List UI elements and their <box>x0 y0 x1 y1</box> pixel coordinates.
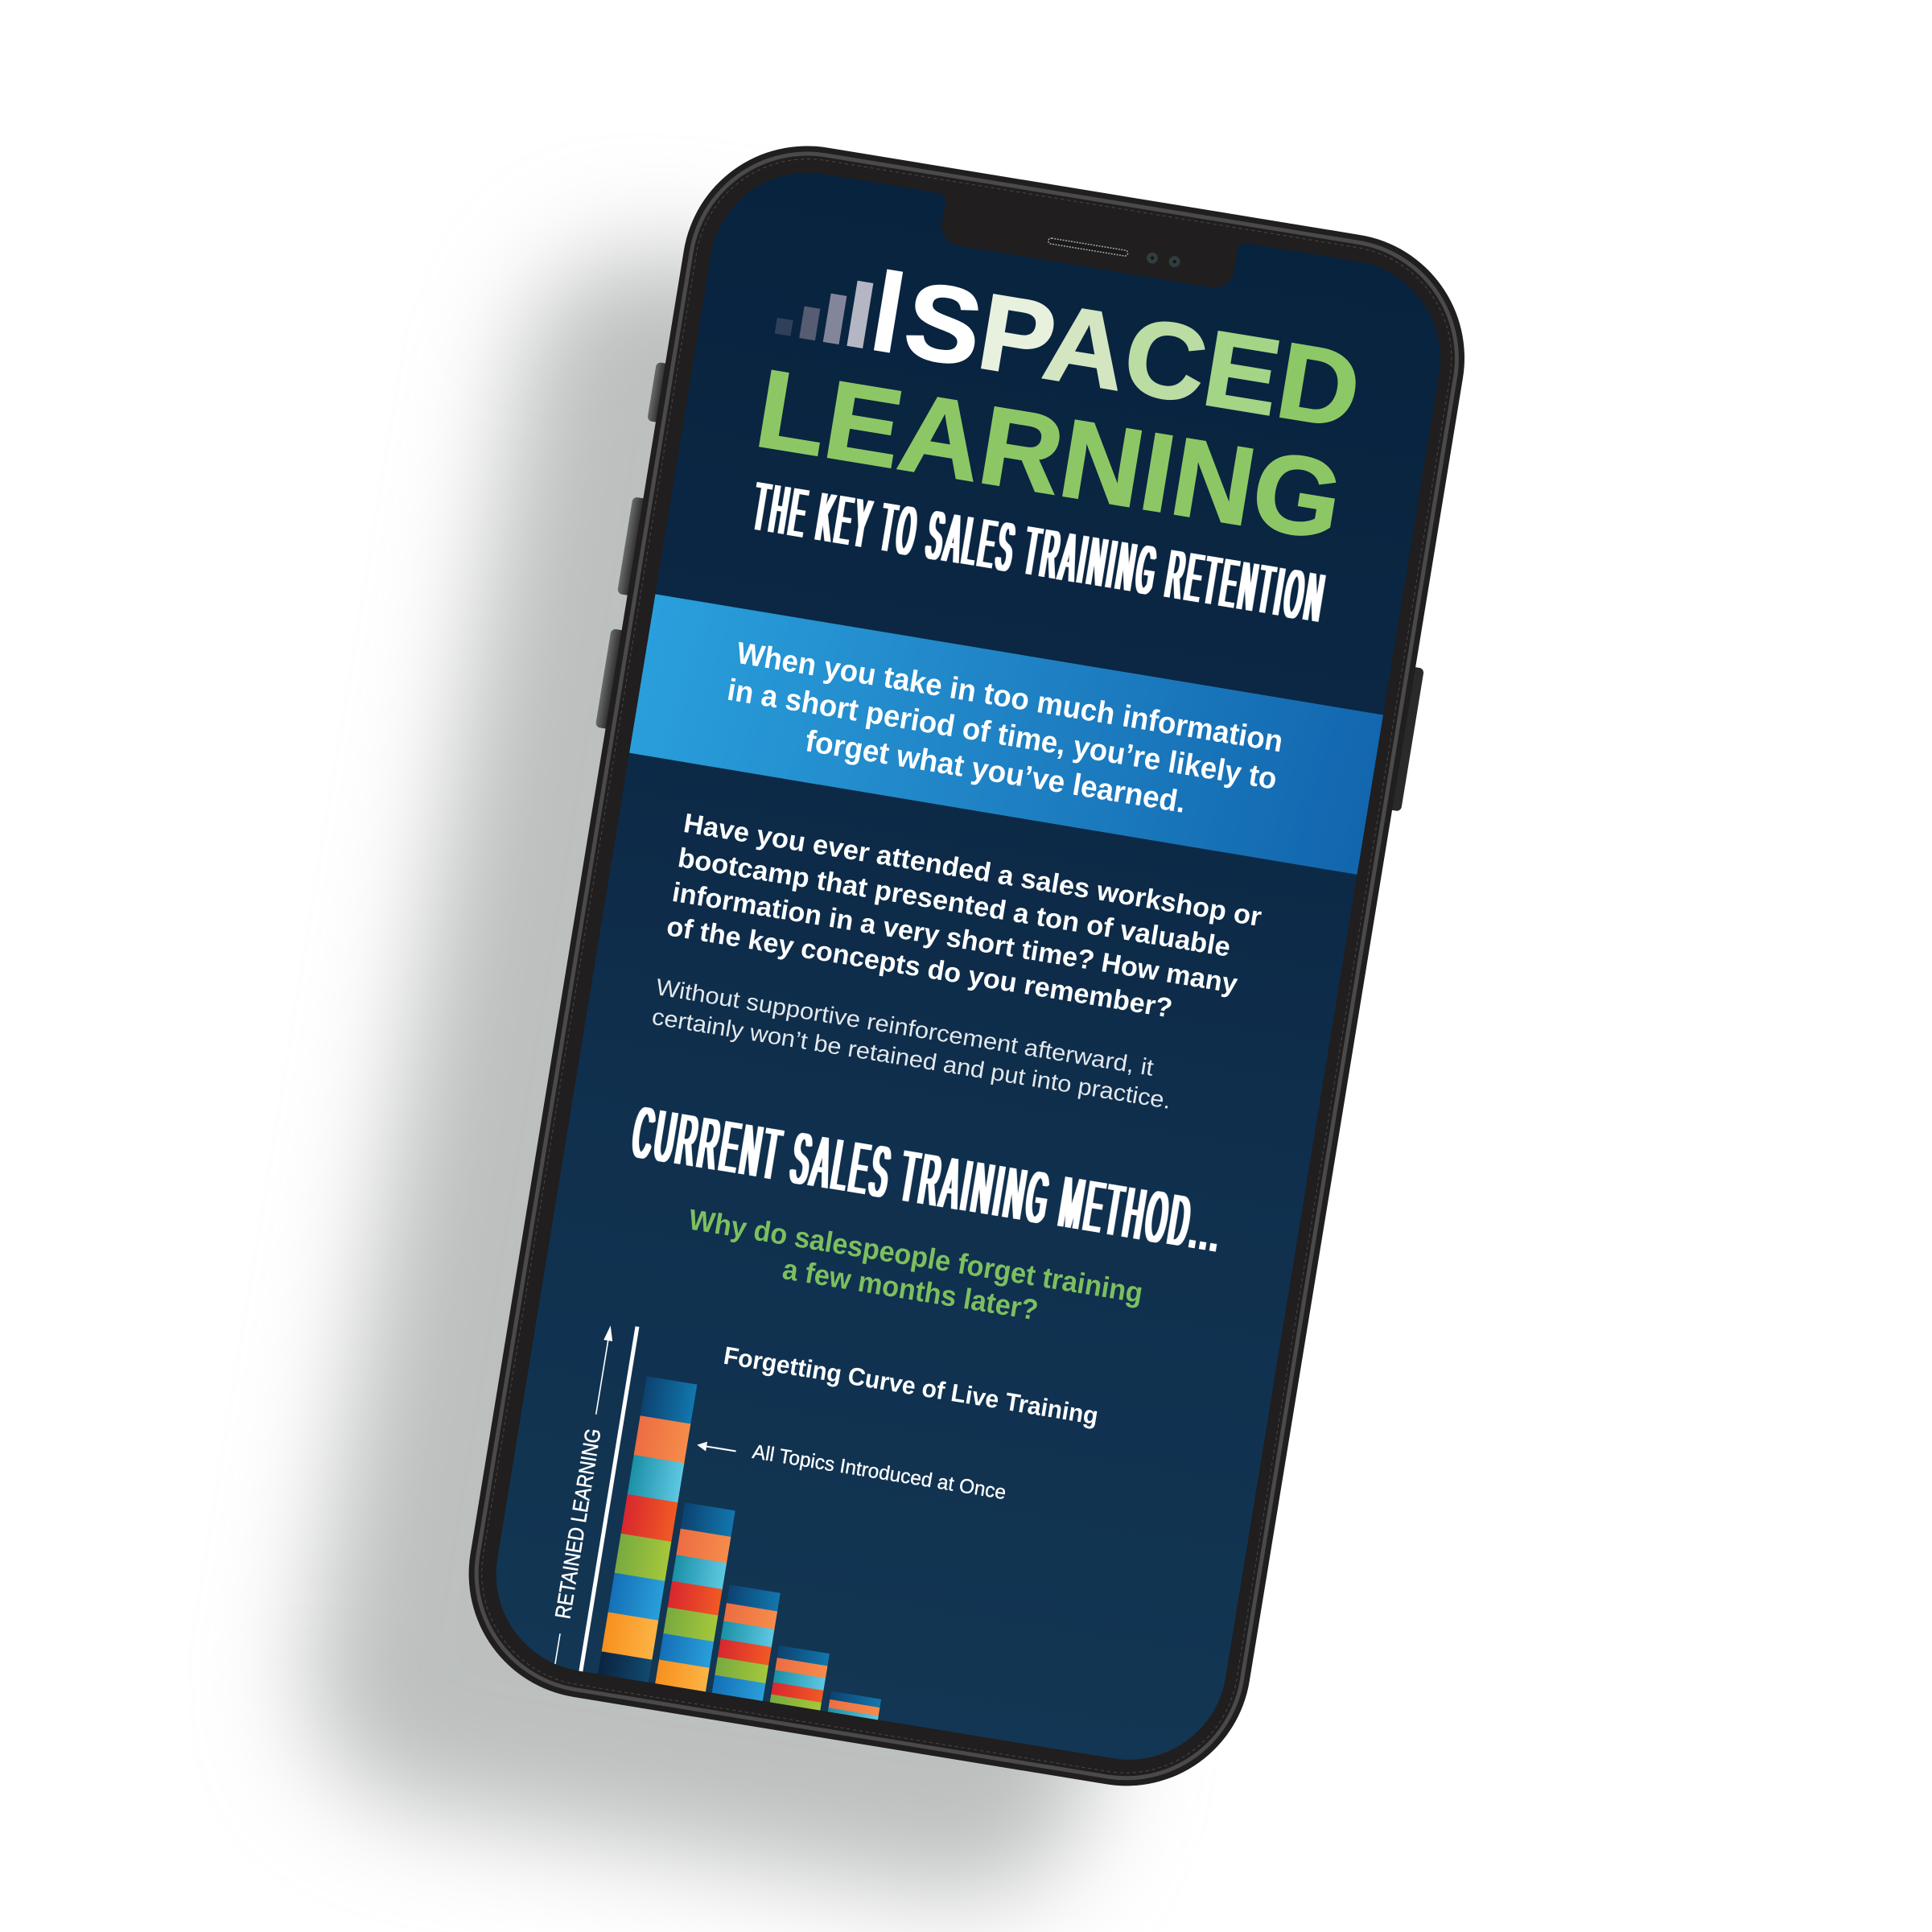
bar 2 <box>655 1502 735 1694</box>
left side buttons <box>595 361 674 730</box>
notch <box>934 187 1245 291</box>
y axis label: RETAINED LEARNING <box>550 1427 606 1621</box>
intro paragraph: bootcamp that presented a ton of valuable <box>676 842 1233 963</box>
bar 3 <box>711 1584 781 1703</box>
secondary paragraph: Without supportive reinforcement afterward, it <box>654 974 1155 1081</box>
intro paragraph: Have you ever attended a sales workshop or <box>682 808 1263 933</box>
intro paragraph: of the key concepts do you remember? <box>665 911 1175 1024</box>
green question: Why do salespeople forget training <box>686 1203 1145 1309</box>
y axis <box>578 1326 639 1679</box>
chart title: Forgetting Curve of Live Training <box>722 1341 1100 1430</box>
callout text: forget what you’ve learned. <box>803 724 1188 820</box>
title: SPACED: SPACED <box>897 259 1368 451</box>
phone drop shadow <box>292 237 1321 1913</box>
intro paragraph <box>665 808 1263 1036</box>
chart annotation: All Topics Introduced at Once <box>751 1440 1007 1504</box>
camera lenses <box>1146 252 1181 268</box>
callout text: in a short period of time, you’re likely to <box>725 674 1279 797</box>
chart: forgetting curve bars <box>554 1325 882 1720</box>
logo bars icon <box>775 253 903 352</box>
bar 4 <box>769 1646 830 1712</box>
phone body <box>451 127 1483 1804</box>
chart annotation arrow <box>696 1440 737 1456</box>
screen <box>479 159 1455 1791</box>
phone <box>440 126 1492 1806</box>
callout text: When you take in too much information <box>734 636 1285 759</box>
bar 5 <box>827 1691 881 1721</box>
green question: a few months later? <box>781 1252 1040 1327</box>
retained learning arrow <box>554 1325 613 1664</box>
speaker <box>1048 238 1128 257</box>
title: LEARNING: LEARNING <box>748 346 1350 564</box>
secondary paragraph: certainly won’t be retained and put into practice. <box>650 1004 1172 1114</box>
bar 1 <box>595 1376 697 1699</box>
blue callout band <box>629 594 1383 875</box>
right side button <box>1384 666 1424 812</box>
intro paragraph: information in a very short time? How many <box>670 877 1240 999</box>
